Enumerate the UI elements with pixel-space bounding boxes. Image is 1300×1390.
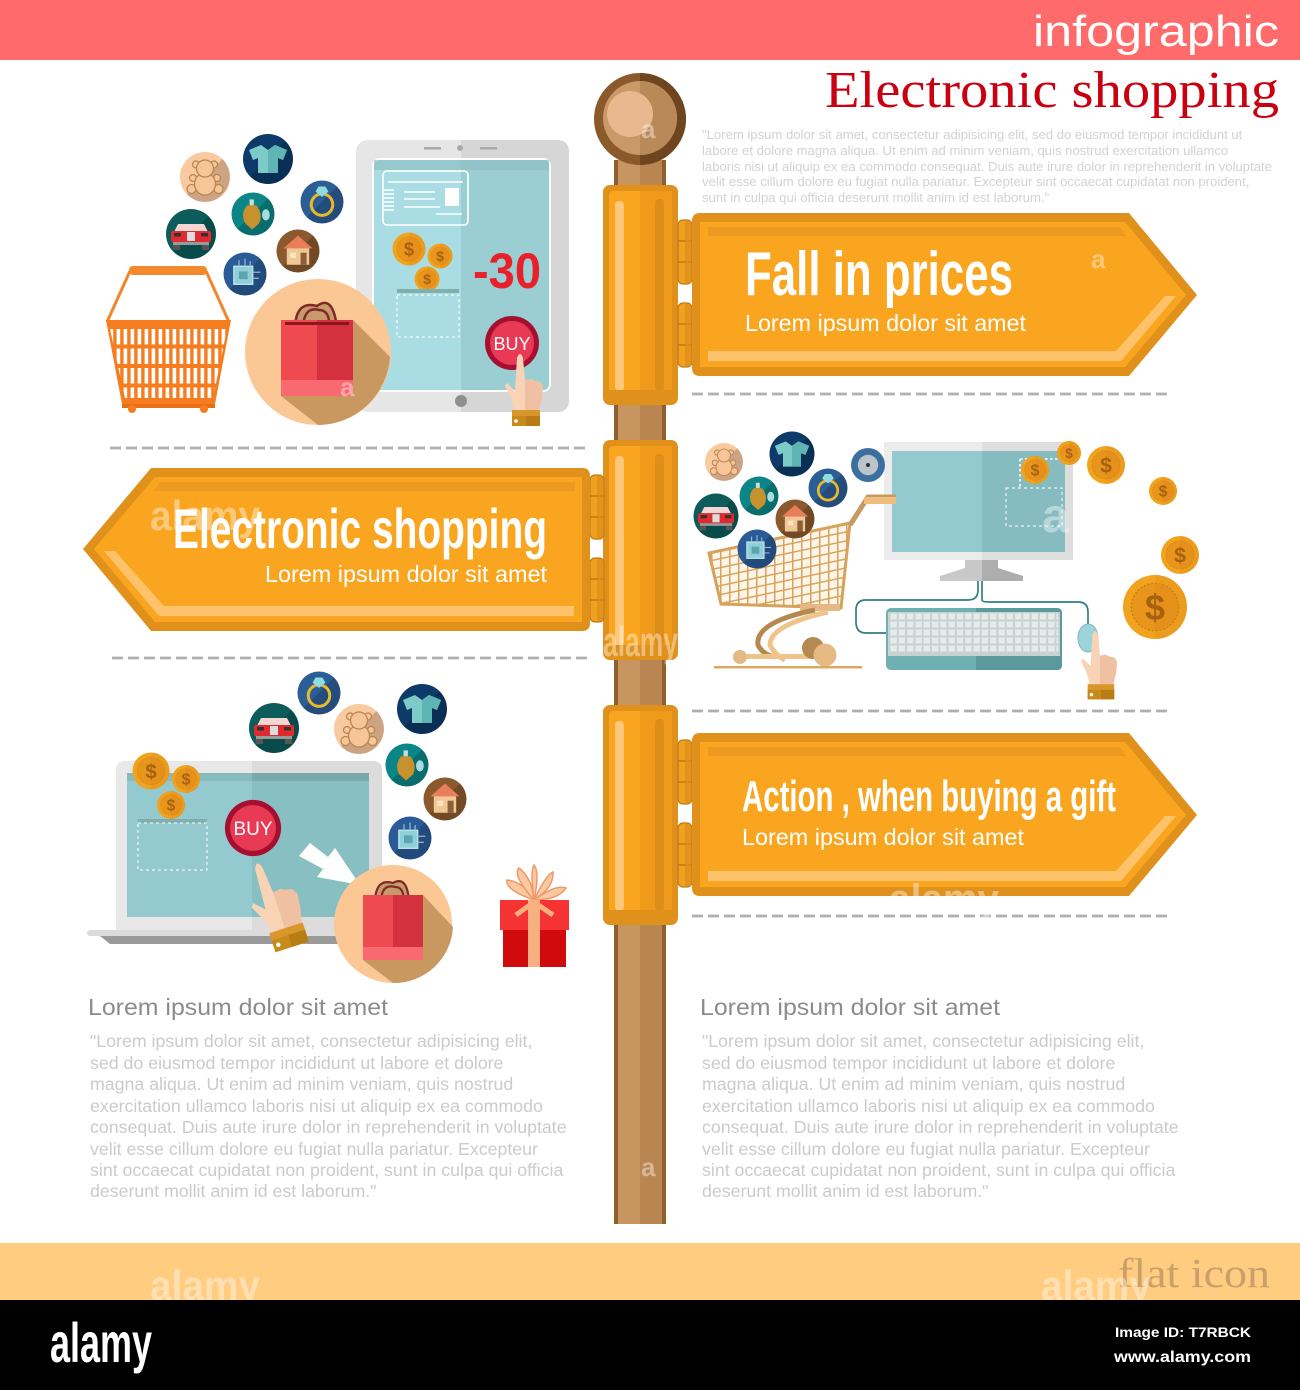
left text block bbox=[88, 994, 567, 1201]
sign subtitle: Lorem ipsum dolor sit amet bbox=[265, 561, 548, 587]
footer band bbox=[0, 1243, 1300, 1300]
intro paragraph: "Lorem ipsum dolor sit amet, consectetur adipisicing elit, sed do eiusmod tempor incididunt ut bbox=[702, 127, 1243, 142]
intro paragraph: velit esse cillum dolore eu fugiat nulla pariatur. Excepteur sint occaecat cupidatat non proident, bbox=[702, 174, 1249, 189]
sign: electronic shopping bbox=[83, 468, 604, 631]
product icons bbox=[694, 432, 885, 568]
icon: keyboard bbox=[886, 608, 1062, 670]
scene: laptop shopping bbox=[87, 672, 569, 983]
coins bbox=[1021, 441, 1199, 639]
body copy: magna aliqua. Ut enim ad minim veniam, quis nostrud bbox=[702, 1074, 1125, 1094]
right text block bbox=[700, 994, 1179, 1201]
stock watermarks: a bbox=[1042, 490, 1069, 543]
intro paragraph: labore et dolore magna aliqua. Ut enim ad minim veniam, quis nostrud exercitation ullamco bbox=[702, 143, 1228, 158]
sign subtitle: Lorem ipsum dolor sit amet bbox=[745, 310, 1027, 336]
header label: infographic: infographic bbox=[1033, 7, 1279, 56]
stock watermarks: a bbox=[641, 114, 656, 144]
icon: tablet bbox=[356, 140, 569, 426]
sign title: Electronic shopping bbox=[173, 497, 547, 560]
coins bbox=[132, 752, 200, 819]
body copy: "Lorem ipsum dolor sit amet, consectetur adipisicing elit, bbox=[702, 1031, 1144, 1051]
main title: Electronic shopping bbox=[825, 62, 1279, 119]
stock watermarks: alamy bbox=[603, 618, 678, 665]
heading: Lorem ipsum dolor sit amet bbox=[700, 994, 1000, 1020]
stock watermarks bbox=[150, 114, 1152, 1309]
buy button: BUY bbox=[493, 334, 531, 354]
post shaft bbox=[614, 160, 666, 1224]
intro paragraph: laboris nisi ut aliquip ex ea commodo consequat. Duis aute irure dolor in reprehenderit in voluptate bbox=[702, 159, 1272, 174]
coins: $ bbox=[182, 772, 191, 789]
heading: Lorem ipsum dolor sit amet bbox=[88, 994, 388, 1020]
stock credit bar bbox=[0, 1300, 1300, 1390]
coins: $ bbox=[1100, 454, 1112, 478]
post knob bbox=[594, 73, 686, 165]
body copy: "Lorem ipsum dolor sit amet, consectetur adipisicing elit, bbox=[90, 1031, 532, 1051]
coins: $ bbox=[404, 239, 415, 260]
stock watermarks: alamy bbox=[889, 877, 1000, 921]
stock watermarks: alamy bbox=[1041, 1262, 1152, 1309]
header band bbox=[0, 0, 1300, 60]
body copy: consequat. Duis aute irure dolor in reprehenderit in voluptate bbox=[702, 1117, 1179, 1137]
body copy: deserunt mollit anim id est laborum." bbox=[702, 1181, 988, 1201]
scene: tablet shopping bbox=[106, 134, 569, 426]
icon: hand bbox=[1081, 631, 1117, 699]
product icons bbox=[166, 134, 344, 296]
stock watermarks: alamy bbox=[150, 1262, 261, 1309]
coins: $ bbox=[423, 271, 431, 287]
discount label: -30 bbox=[473, 243, 541, 299]
coins: $ bbox=[1065, 446, 1073, 461]
body copy: sed do eiusmod tempor incididunt ut labore et dolore bbox=[90, 1053, 504, 1073]
sign: fall in prices bbox=[678, 213, 1197, 376]
body copy: deserunt mollit anim id est laborum." bbox=[90, 1181, 376, 1201]
icon: hand bbox=[505, 354, 543, 426]
buy button bbox=[485, 316, 539, 370]
cables bbox=[856, 581, 1088, 633]
footer label: flat icon: flat icon bbox=[1118, 1250, 1270, 1296]
coins bbox=[392, 232, 452, 292]
body copy: sint occaecat cupidatat non proident, sunt in culpa qui officia bbox=[702, 1160, 1175, 1180]
post sleeve 2 bbox=[603, 440, 678, 660]
icon: shopping cart bbox=[709, 497, 896, 668]
body copy: velit esse cillum dolore eu fugiat nulla pariatur. Excepteur bbox=[90, 1139, 538, 1159]
image id: Image ID: T7RBCK bbox=[1115, 1324, 1251, 1340]
sign subtitle: Lorem ipsum dolor sit amet bbox=[742, 824, 1025, 850]
buy button: BUY bbox=[233, 819, 273, 840]
intro paragraph bbox=[702, 127, 1272, 205]
sign title: Fall in prices bbox=[745, 240, 1013, 309]
body copy: exercitation ullamco laboris nisi ut aliquip ex ea commodo bbox=[90, 1096, 543, 1116]
coins: $ bbox=[1031, 463, 1040, 480]
arrow bbox=[299, 843, 360, 885]
stock watermarks: a bbox=[340, 372, 355, 402]
body copy bbox=[702, 1031, 1179, 1201]
icon: laptop bbox=[87, 761, 382, 944]
coins: $ bbox=[145, 760, 157, 783]
dashed separators bbox=[110, 394, 1170, 916]
signpost bbox=[594, 73, 686, 1224]
intro paragraph: sunt in culpa qui officia deserunt mollit anim id est laborum." bbox=[702, 190, 1050, 205]
buy button bbox=[225, 800, 281, 856]
icon: hand bbox=[239, 855, 312, 955]
coins: $ bbox=[1159, 484, 1168, 501]
coins: $ bbox=[1174, 544, 1186, 568]
icon: mouse bbox=[1078, 624, 1098, 652]
body copy: exercitation ullamco laboris nisi ut aliquip ex ea commodo bbox=[702, 1096, 1155, 1116]
stock watermarks: a bbox=[1091, 244, 1106, 274]
stock watermarks: alamy bbox=[150, 492, 261, 539]
payment card bbox=[383, 171, 468, 225]
sign: action when buying a gift bbox=[678, 733, 1197, 896]
icon: gift box bbox=[500, 865, 569, 967]
coins: $ bbox=[167, 798, 176, 815]
coins: $ bbox=[1145, 588, 1165, 628]
post sleeve 3 bbox=[603, 705, 678, 925]
body copy: sint occaecat cupidatat non proident, sunt in culpa qui officia bbox=[90, 1160, 563, 1180]
icon: shopping bag badge bbox=[334, 865, 453, 983]
body copy: sed do eiusmod tempor incididunt ut labore et dolore bbox=[702, 1053, 1116, 1073]
icon: shopping basket bbox=[106, 266, 231, 413]
icon: shopping bag badge bbox=[245, 279, 391, 425]
body copy: consequat. Duis aute irure dolor in reprehenderit in voluptate bbox=[90, 1117, 567, 1137]
product icons bbox=[249, 672, 466, 860]
stock watermarks: a bbox=[641, 1152, 656, 1182]
coins: $ bbox=[436, 248, 444, 264]
body copy bbox=[90, 1031, 567, 1201]
post sleeve 1 bbox=[603, 185, 678, 405]
body copy: velit esse cillum dolore eu fugiat nulla pariatur. Excepteur bbox=[702, 1139, 1150, 1159]
scene: desktop shopping bbox=[694, 432, 1199, 699]
alamy logo: alamy bbox=[50, 1311, 152, 1374]
website: www.alamy.com bbox=[1113, 1349, 1251, 1366]
body copy: magna aliqua. Ut enim ad minim veniam, quis nostrud bbox=[90, 1074, 513, 1094]
icon: monitor bbox=[884, 442, 1073, 581]
sign title: Action , when buying a gift bbox=[742, 772, 1116, 821]
